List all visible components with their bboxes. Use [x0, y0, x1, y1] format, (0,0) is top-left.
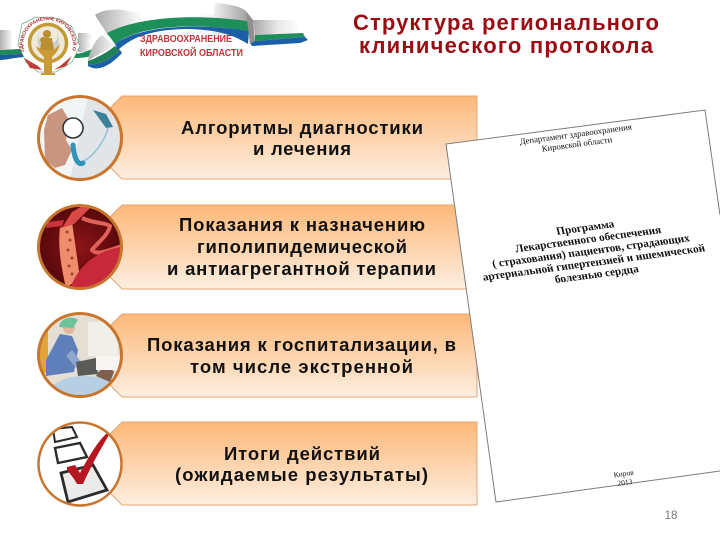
text: Итоги действий [224, 443, 380, 464]
document main text: Лекарственного обеспечения [514, 224, 662, 255]
text: и антиагрегантной терапии [167, 258, 436, 279]
icon: blood vessel [38, 205, 122, 289]
text [147, 334, 456, 377]
text: гиполипидемической [197, 236, 407, 257]
icon: checklist [38, 422, 122, 506]
text: (ожидаемые результаты) [175, 464, 428, 485]
text [167, 214, 436, 279]
document main text: Программа [555, 218, 616, 238]
document footer text: Киров [613, 468, 635, 479]
text: том числе экстренной [190, 356, 413, 377]
ribbon left tail [0, 30, 96, 60]
panel: action results [108, 422, 477, 505]
text [175, 443, 428, 485]
banner: ribbon and logo: КИРОВСКОЙ ОБЛАСТИ [140, 46, 243, 59]
title: клинического протокола [359, 33, 654, 58]
text: Алгоритмы диагностики [181, 117, 423, 138]
document main text: ( страхования) пациентов, страдающих [491, 232, 691, 270]
icon: nurse with patient photo [38, 313, 122, 397]
text: Показания к госпитализации, в [147, 334, 456, 355]
document header text: Департамент здравоохранения [519, 122, 632, 146]
logo caption: ЗДРАВООХРАНЕНИЕ [140, 33, 232, 45]
panel: document sheet [446, 110, 720, 502]
document main text [473, 207, 710, 295]
document header text: Кировской области [541, 134, 613, 154]
text: Показания к назначению [179, 214, 425, 235]
text: и лечения [253, 138, 351, 159]
icon: stethoscope photo [38, 96, 122, 180]
document footer text [613, 468, 636, 488]
text [181, 117, 423, 159]
document main text: артериальной гипертензией и ишемической [481, 242, 707, 284]
panel: diagnostics and treatment [108, 96, 477, 179]
panel: hospitalization indications [108, 314, 477, 397]
title [353, 10, 659, 58]
document main text: болезнью сердца [554, 263, 640, 286]
title: Структура регионального [353, 10, 659, 35]
banner: ribbon and logo [0, 3, 308, 75]
logo emblem [18, 16, 80, 75]
panel: therapy indications [108, 205, 477, 289]
ribbon main sweep [88, 3, 308, 68]
page number: 18 [665, 510, 677, 522]
document footer text: 2013 [617, 477, 633, 488]
